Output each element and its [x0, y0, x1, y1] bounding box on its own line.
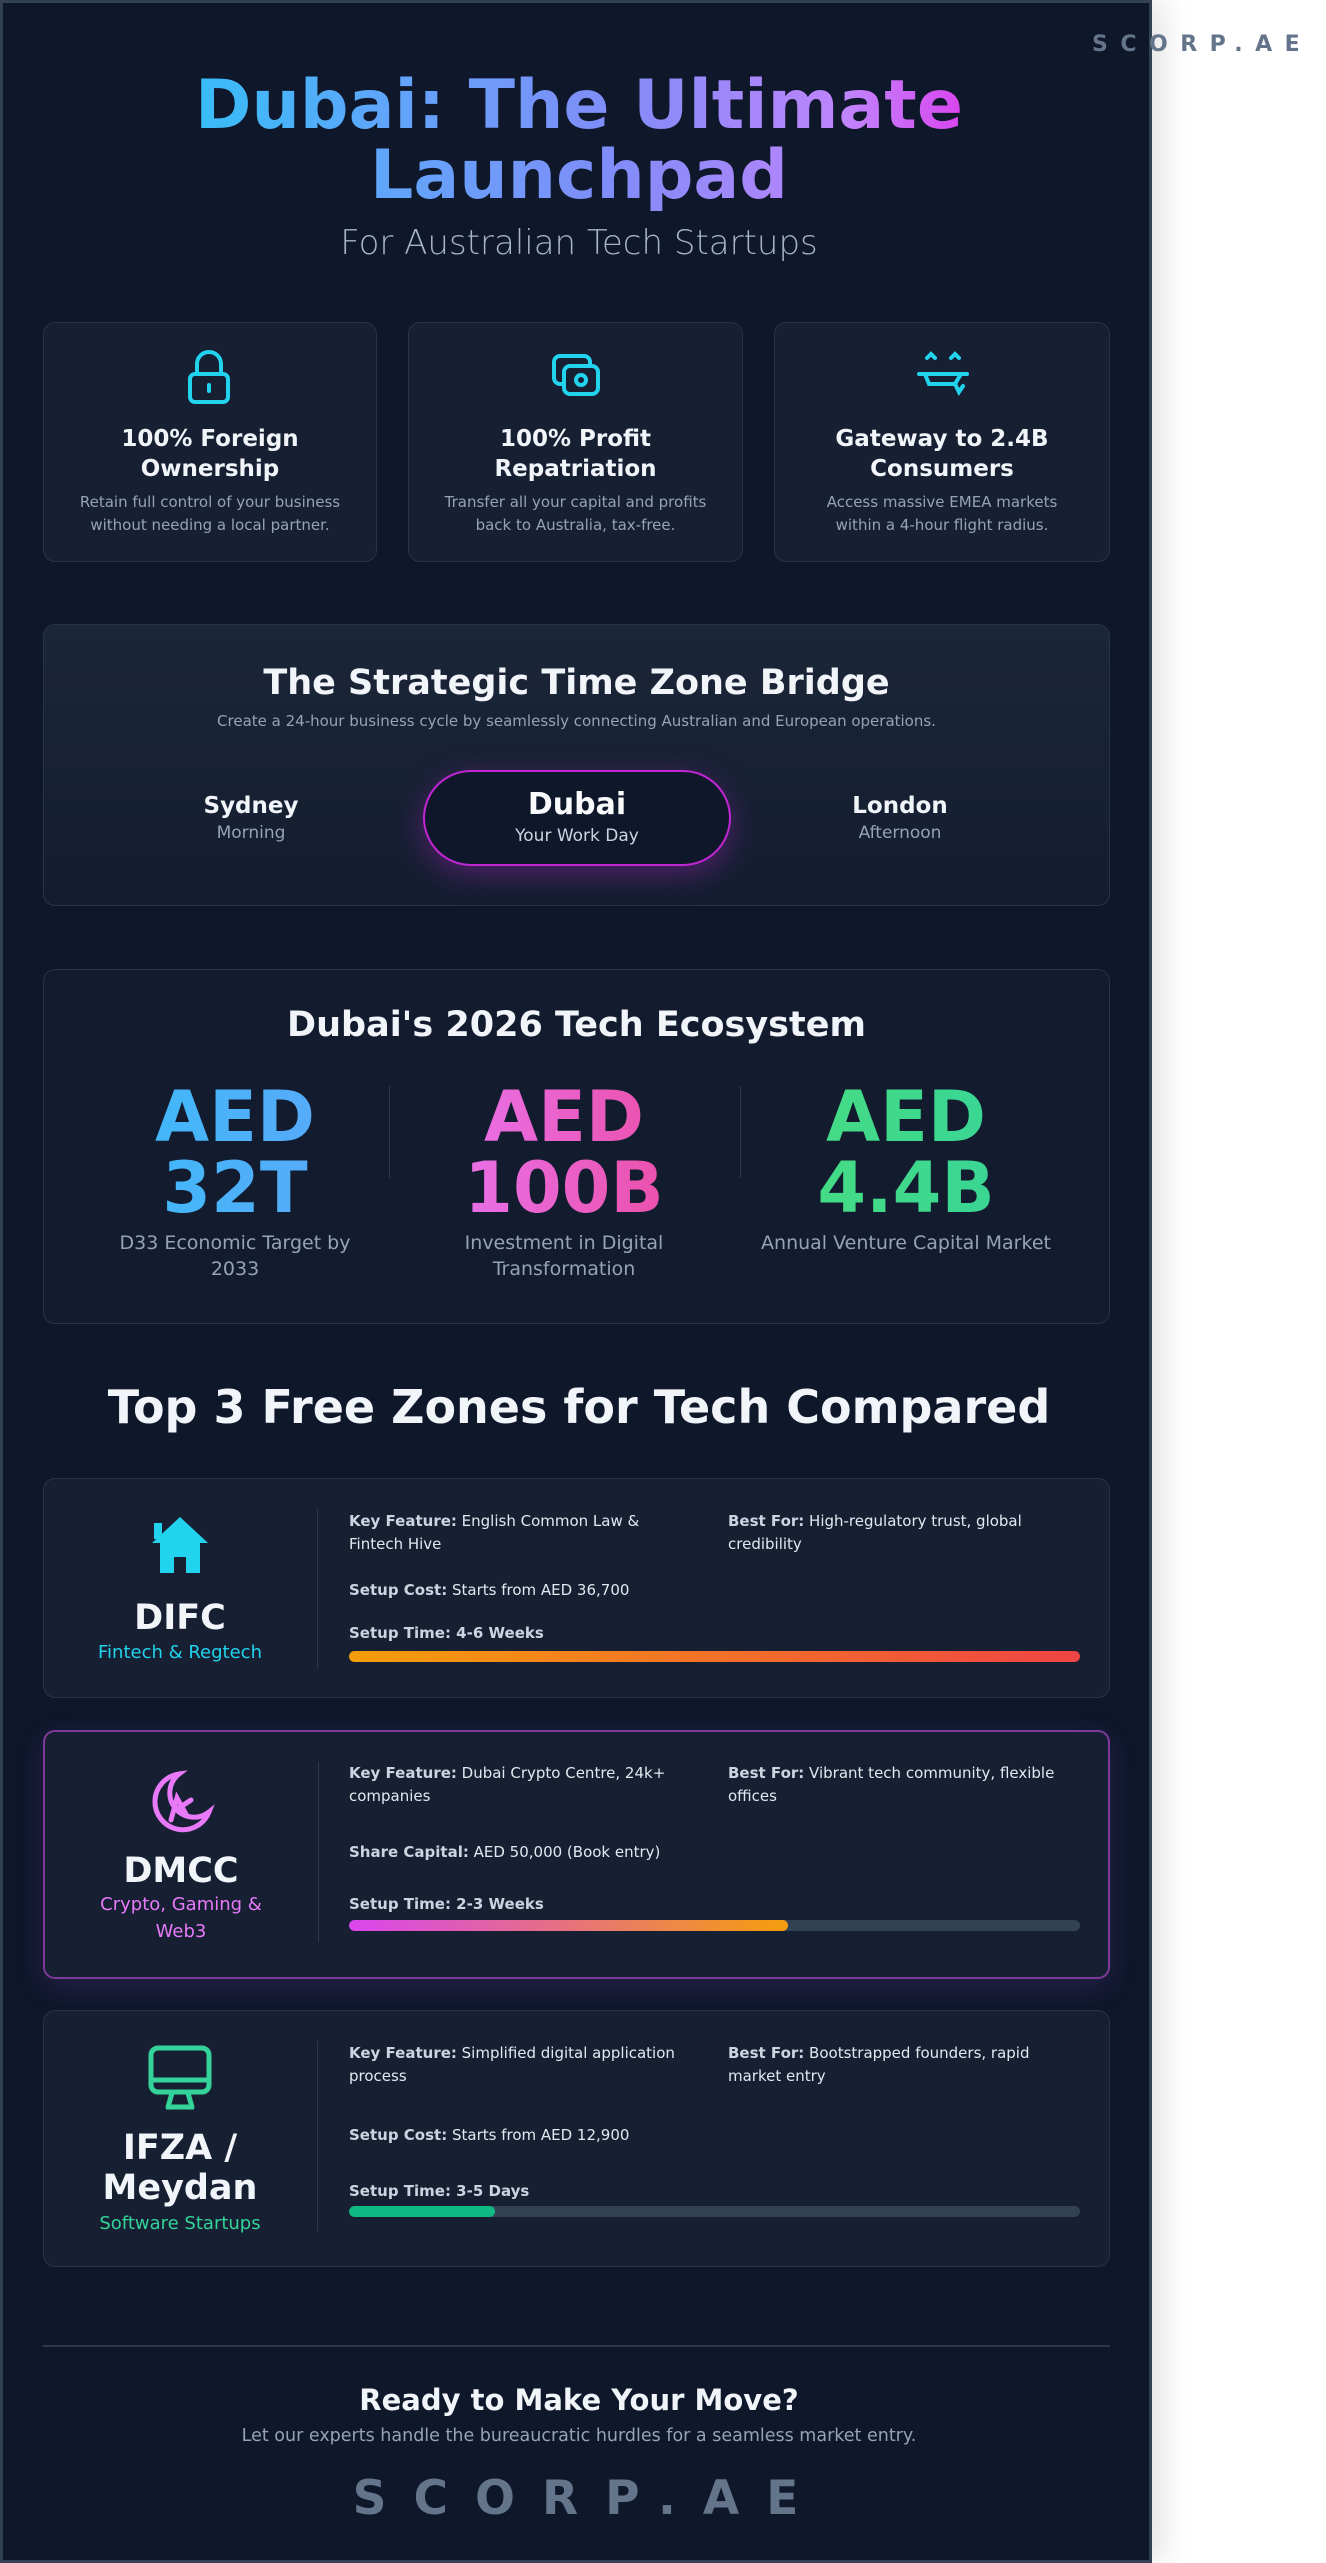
title: Launchpad	[370, 136, 788, 215]
card: DIFC	[43, 1478, 1110, 1698]
sydney: Morning	[217, 823, 285, 843]
stat 1: 32T	[162, 1147, 308, 1229]
card: gateway: Gateway to 2.4B	[835, 426, 1049, 452]
card: profit repatriation: back to Australia, tax-free.	[476, 516, 675, 534]
stat 2: Transformation	[493, 1258, 635, 1280]
card: foreign ownership: Retain full control of your business	[80, 493, 340, 511]
panel: ecosystem	[43, 969, 1110, 1324]
card: foreign ownership	[43, 322, 377, 562]
card: profit repatriation	[408, 322, 743, 562]
footer cta: Let our experts handle the bureaucratic hurdles for a seamless market entry.	[242, 2426, 916, 2446]
stat 1: D33 Economic Target by	[120, 1232, 350, 1254]
card: profit repatriation: Transfer all your capital and profits	[445, 493, 706, 511]
text: Setup Cost: Starts from AED 12,900	[349, 2126, 629, 2144]
text: Best For: Bootstrapped founders, rapid market entry	[728, 2044, 1030, 2085]
london: London	[852, 793, 948, 819]
card: IFZA: Meydan	[102, 2168, 257, 2208]
icon: lock	[188, 350, 230, 404]
card: gateway: within a 4-hour flight radius.	[836, 516, 1048, 534]
card: IFZA	[43, 2010, 1110, 2267]
footer cta	[242, 2383, 916, 2446]
card: profit repatriation: Repatriation	[494, 456, 657, 482]
stat 1: 2033	[211, 1258, 259, 1280]
dubai pill	[423, 770, 731, 866]
card: gateway: Consumers	[870, 456, 1014, 482]
card: DIFC: DIFC	[134, 1598, 226, 1638]
sydney: Sydney	[204, 793, 298, 819]
footer logo: SCORP.AE	[353, 2471, 825, 2526]
card: profit repatriation: 100% Profit	[500, 426, 651, 452]
card: DMCC: DMCC	[123, 1851, 239, 1891]
title: Dubai: The Ultimate	[195, 66, 963, 145]
DMCC details	[349, 1764, 1080, 1931]
text: Key Feature: English Common Law & Fintech Hive	[349, 1512, 639, 1553]
text: Best For: High-regulatory trust, global credibility	[728, 1512, 1022, 1553]
card: foreign ownership: Ownership	[141, 456, 279, 482]
stat 3: Annual Venture Capital Market	[761, 1232, 1051, 1254]
icon: monitor	[148, 2046, 212, 2110]
DIFC details	[349, 1512, 1080, 1662]
sydney	[204, 793, 298, 843]
text: Share Capital: AED 50,000 (Book entry)	[349, 1843, 660, 1861]
IFZA details	[349, 2044, 1080, 2217]
stat 2	[464, 1076, 664, 1280]
stat 2: Investment in Digital	[465, 1232, 663, 1254]
card: IFZA: IFZA /	[123, 2128, 237, 2168]
top-right logo: SCORP.AE	[1092, 32, 1312, 57]
panel: time zone bridge	[43, 624, 1110, 906]
panel: ecosystem: Dubai's 2026 Tech Ecosystem	[287, 1005, 866, 1045]
subtitle: For Australian Tech Startups	[340, 223, 818, 263]
stat 3: AED	[826, 1076, 986, 1158]
text: Setup Time: 3-5 Days	[349, 2182, 529, 2200]
card: DIFC: Fintech & Regtech	[98, 1642, 262, 1663]
icon: money	[552, 354, 600, 396]
stat 1	[120, 1076, 350, 1280]
panel: time zone bridge: Create a 24-hour business cycle by seamlessly connecting Australian and European operations.	[217, 712, 936, 730]
card: DMCC: Web3	[156, 1921, 206, 1942]
text: Key Feature: Dubai Crypto Centre, 24k+ companies	[349, 1764, 665, 1805]
text: Setup Time: 2-3 Weeks	[349, 1895, 544, 1913]
text: Best For: Vibrant tech community, flexible offices	[728, 1764, 1054, 1805]
text: Key Feature: Simplified digital application process	[349, 2044, 675, 2085]
dubai pill: Dubai	[528, 787, 626, 822]
heading: free zones: Top 3 Free Zones for Tech Compared	[108, 1380, 1050, 1434]
card: gateway: Access massive EMEA markets	[827, 493, 1057, 511]
card: gateway	[774, 322, 1110, 562]
card: foreign ownership: without needing a local partner.	[90, 516, 330, 534]
london: Afternoon	[859, 823, 941, 843]
stat 2: AED	[484, 1076, 644, 1158]
footer cta: Ready to Make Your Move?	[359, 2383, 799, 2417]
card: foreign ownership: 100% Foreign	[121, 426, 299, 452]
dubai pill: Your Work Day	[515, 826, 639, 846]
london	[852, 793, 948, 843]
card: DMCC	[43, 1730, 1110, 1979]
icon: house	[152, 1517, 208, 1573]
stat 2: 100B	[464, 1147, 664, 1229]
icon: moon	[152, 1770, 215, 1832]
card: IFZA: Software Startups	[99, 2213, 261, 2234]
icon: plane	[917, 351, 969, 396]
panel: time zone bridge: The Strategic Time Zone Bridge	[263, 663, 890, 703]
text: Setup Cost: Starts from AED 36,700	[349, 1581, 629, 1599]
stat 3	[761, 1076, 1051, 1254]
card: DMCC: Crypto, Gaming &	[100, 1894, 262, 1915]
title	[195, 66, 963, 215]
stat 1: AED	[155, 1076, 315, 1158]
text: Setup Time: 4-6 Weeks	[349, 1624, 544, 1642]
stat 3: 4.4B	[817, 1147, 995, 1229]
